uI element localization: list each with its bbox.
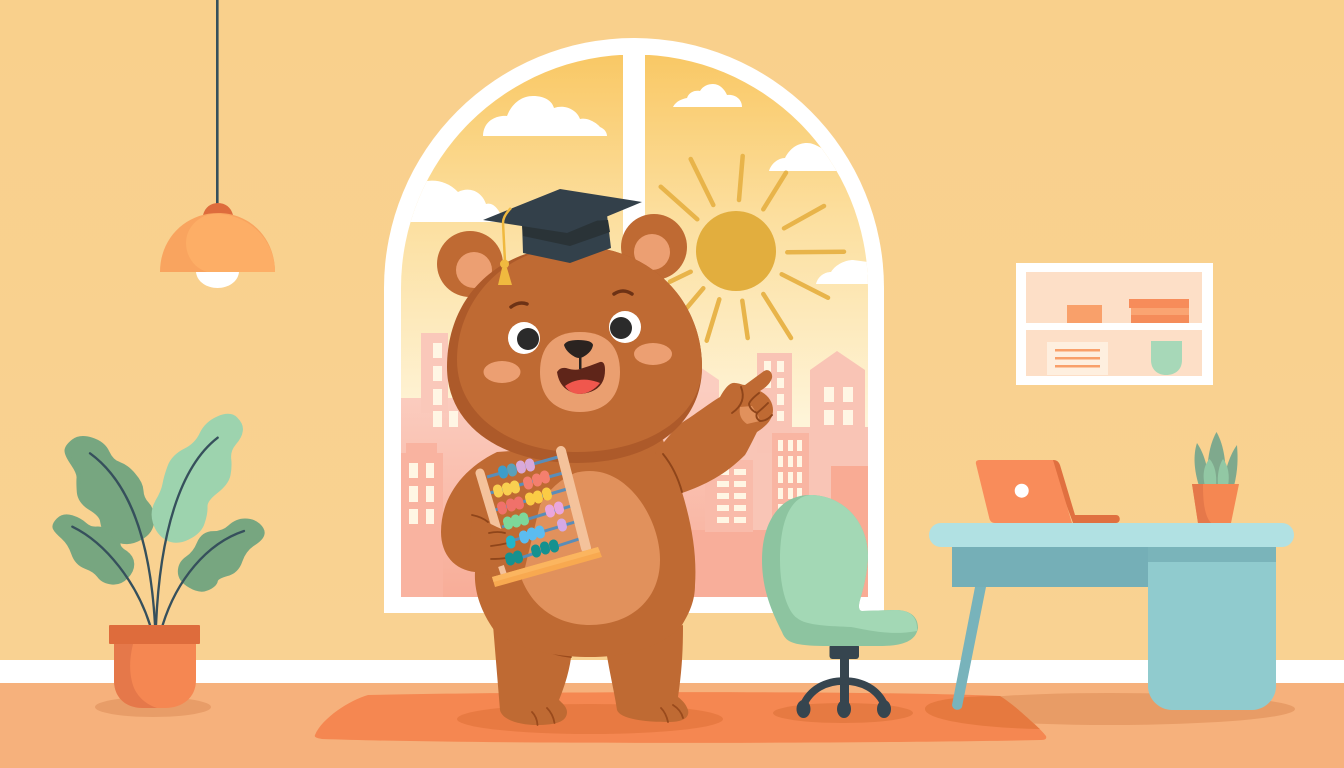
laptop (976, 460, 1120, 523)
pendant lamp (160, 0, 275, 288)
graduation cap (483, 189, 642, 285)
potted succulent (1192, 432, 1239, 523)
desk top (929, 523, 1294, 547)
bear shadow (457, 704, 723, 734)
bear pointing arm (655, 370, 773, 493)
window view (400, 55, 868, 597)
stacked books (1129, 299, 1189, 323)
desk pedestal (1148, 547, 1276, 710)
city skyline (401, 333, 868, 597)
palm (740, 406, 760, 424)
eyes (508, 322, 540, 354)
desk (929, 432, 1294, 710)
bear body (441, 440, 695, 657)
leaves (55, 416, 262, 625)
cheeks (484, 361, 520, 383)
muzzle (540, 332, 620, 412)
desk leg (952, 587, 986, 710)
office chair (762, 495, 918, 718)
lamp cord (216, 0, 219, 205)
box (1067, 305, 1102, 323)
bear head (447, 246, 702, 463)
window frame (384, 38, 884, 613)
window mullion (623, 40, 645, 300)
bear belly (522, 471, 660, 625)
base (492, 547, 602, 587)
holding hand (468, 515, 508, 575)
lamp cap (203, 203, 233, 215)
mouth (557, 362, 605, 394)
building windows (409, 343, 853, 524)
eyebrows (511, 291, 632, 307)
chair wheels (796, 700, 891, 718)
shelf frame (1016, 263, 1213, 385)
window (384, 38, 884, 613)
floor plant (55, 416, 262, 717)
nose (564, 340, 593, 358)
left post (480, 473, 497, 530)
finger lines (663, 387, 772, 492)
sky (401, 55, 868, 427)
chair shell (762, 495, 918, 646)
desk apron (952, 547, 1148, 587)
chair cushion (780, 495, 917, 633)
clouds (400, 84, 868, 284)
bear ears (437, 214, 687, 297)
beads (498, 463, 562, 561)
sun (661, 156, 844, 341)
paper note (1047, 342, 1108, 375)
wall shelf (1016, 263, 1213, 385)
green cup (1151, 341, 1182, 375)
floor (0, 682, 1344, 768)
bear legs (493, 625, 688, 725)
rods (487, 457, 579, 562)
plant shadow (95, 697, 211, 717)
post foot (501, 566, 505, 578)
desk shadow (925, 693, 1295, 729)
claws and leg creases (532, 647, 683, 725)
lamp bulb (196, 272, 239, 288)
tassel (503, 208, 511, 262)
abacus and holding hand (468, 451, 602, 587)
lamp shade (160, 213, 275, 272)
pot (114, 644, 196, 708)
chair base (803, 681, 885, 706)
baseboard (0, 660, 1344, 683)
rug (315, 692, 1046, 743)
right post (561, 451, 586, 548)
chair neck (830, 644, 859, 659)
chair post (840, 655, 849, 707)
chair shadow (773, 703, 913, 723)
bear (437, 189, 773, 725)
